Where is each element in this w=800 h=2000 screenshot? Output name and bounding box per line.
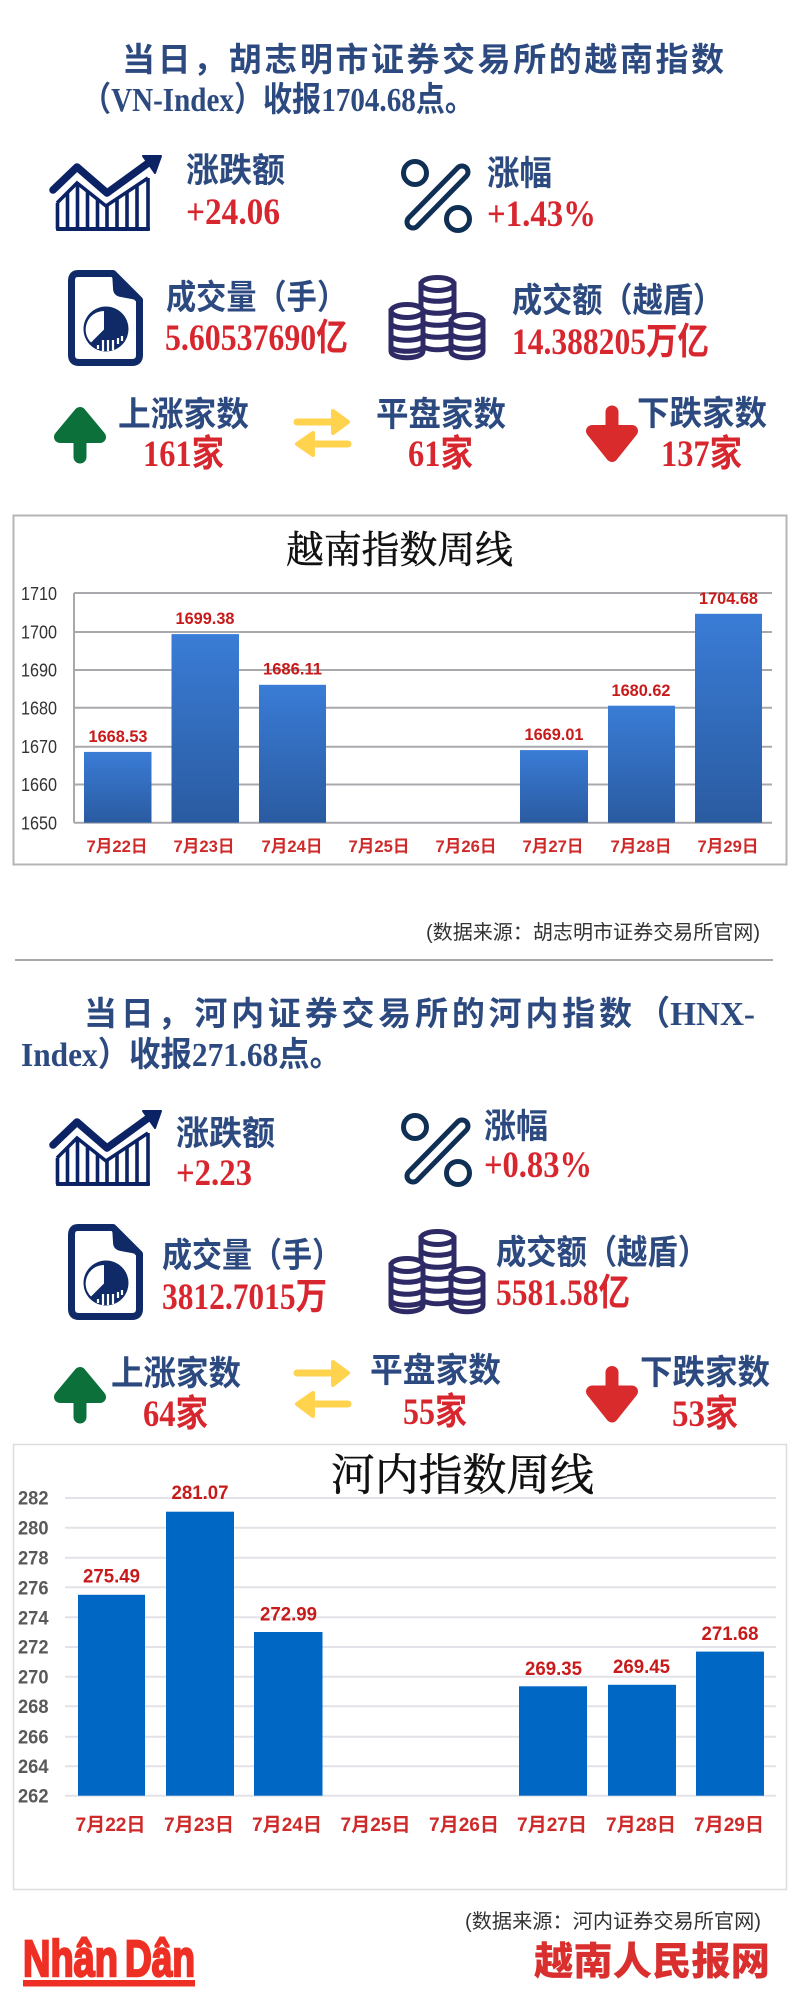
title: HNX-Index headline: 当日，河内证券交易所的河内指数: [84, 996, 632, 1033]
y axis labels: 266: [18, 1728, 48, 1748]
stat: change amount: +2.23: [176, 1153, 252, 1194]
icon: coin stacks: [391, 1232, 483, 1312]
stat: advancers: 161家: [143, 433, 224, 475]
date labels: 7月25日: [348, 837, 410, 856]
icon: document with pie chart: [72, 272, 142, 362]
bar chart: HNX-Index weekly: [14, 1439, 786, 1890]
stat: turnover: [496, 1234, 708, 1314]
y axis labels: 268: [18, 1697, 48, 1718]
y axis labels: [18, 1488, 49, 1808]
y axis labels: 270: [18, 1668, 48, 1688]
y axis labels: 1710: [21, 584, 57, 604]
y axis labels: [21, 584, 57, 834]
bars: [78, 1512, 764, 1796]
stat: unchanged: 55家: [403, 1391, 467, 1433]
stat: unchanged: 平盘家数: [370, 1352, 501, 1390]
stats panel: VN-Index: [53, 152, 767, 475]
value labels: 275.49: [83, 1566, 140, 1588]
y axis labels: 1680: [21, 698, 57, 718]
stat: decliners: 下跌家数: [637, 395, 767, 433]
icon: red down arrow: [592, 412, 632, 456]
stat: volume: 成交量（手）: [162, 1237, 342, 1275]
stat: advancers: 上涨家数: [118, 396, 249, 434]
stat: decliners: [640, 1354, 770, 1435]
icon: green up arrow: [60, 1373, 100, 1417]
title: HNX-Index headline: [21, 995, 755, 1074]
stat: change amount: [176, 1115, 275, 1194]
stat: decliners: 下跌家数: [640, 1354, 770, 1392]
stat: turnover: [512, 282, 723, 363]
stat: change percent: 涨幅: [484, 1108, 548, 1146]
icon: trend chart: [53, 1111, 161, 1186]
date labels: [76, 1815, 764, 1836]
y axis labels: 278: [18, 1548, 48, 1570]
y axis labels: 262: [18, 1786, 48, 1808]
stat: volume: 成交量（手）: [166, 279, 347, 317]
stat: advancers: [111, 1355, 241, 1435]
stat: advancers: [118, 396, 249, 475]
stat: change amount: +24.06: [186, 192, 280, 233]
icon: yellow swap arrows: [297, 1362, 348, 1416]
chart title: 河内指数周线: [331, 1439, 594, 1503]
stats panel: HNX-Index: [53, 1108, 770, 1435]
stat: change percent: 涨幅: [487, 155, 552, 193]
date labels: 7月28日: [610, 837, 672, 856]
y axis labels: 264: [18, 1757, 49, 1778]
stat: turnover: 成交额（越盾）: [512, 282, 723, 320]
stat: change percent: +1.43%: [487, 194, 596, 235]
title: VN-Index headline: [82, 42, 724, 119]
date labels: 7月24日: [252, 1815, 322, 1836]
y axis labels: 282: [18, 1488, 48, 1510]
date labels: 7月27日: [517, 1815, 587, 1836]
y axis labels: 276: [18, 1578, 48, 1600]
stat: decliners: [637, 395, 767, 475]
chart title: 越南指数周线: [286, 519, 513, 574]
stat: unchanged: 61家: [408, 433, 473, 475]
value labels: 1680.62: [612, 681, 670, 700]
value labels: 1669.01: [524, 725, 584, 744]
logo: Nhan Dan: Dân: [125, 1930, 195, 1987]
value labels: 1704.68: [699, 589, 758, 608]
y axis labels: 1690: [21, 660, 57, 680]
title: HNX-Index headline: Index）收报271.68点。: [21, 1036, 341, 1074]
date labels: 7月22日: [86, 837, 148, 856]
stat: change amount: 涨跌额: [186, 152, 285, 190]
value labels: 1668.53: [88, 727, 148, 746]
stat: change amount: 涨跌额: [176, 1115, 275, 1153]
value labels: 1699.38: [176, 609, 234, 628]
bars: [84, 614, 762, 823]
date labels: 7月25日: [340, 1815, 410, 1836]
stat: volume: 3812.7015万: [162, 1277, 327, 1318]
title: HNX-Index headline: （HNX-: [637, 995, 755, 1033]
source note: VN-Index: (数据来源：胡志明市证券交易所官网): [426, 921, 760, 944]
stat: change amount: [186, 152, 285, 233]
bar chart: VN-Index weekly: [14, 516, 786, 864]
value labels: [83, 1483, 758, 1680]
date labels: 7月22日: [76, 1815, 146, 1836]
y axis labels: 1660: [21, 775, 57, 795]
stat: decliners: 53家: [672, 1393, 738, 1435]
icon: trend chart: [53, 156, 161, 231]
date labels: [86, 837, 758, 856]
source note: HNX-Index: (数据来源：河内证券交易所官网): [465, 1910, 761, 1933]
value labels: 281.07: [172, 1483, 228, 1504]
stat: advancers: 64家: [143, 1393, 208, 1435]
stat: turnover: 14.388205万亿: [512, 321, 709, 363]
stat: turnover: 5581.58亿: [496, 1272, 630, 1314]
icon: yellow swap arrows: [297, 411, 348, 455]
y axis labels: 1670: [21, 737, 57, 757]
stat: turnover: 成交额（越盾）: [496, 1234, 708, 1272]
stat: unchanged: 平盘家数: [376, 396, 506, 434]
date labels: 7月29日: [694, 1815, 764, 1836]
y axis labels: 280: [18, 1518, 48, 1540]
y axis labels: 1700: [21, 622, 57, 642]
stat: volume: [165, 279, 348, 359]
logo: Nhan Dan: Nhân: [23, 1930, 118, 1987]
stat: advancers: 上涨家数: [111, 1355, 241, 1393]
stat: change percent: +0.83%: [484, 1145, 592, 1186]
icon: document with pie chart: [72, 1226, 142, 1316]
y axis labels: 272: [18, 1638, 48, 1658]
stat: volume: 5.60537690亿: [165, 317, 348, 359]
brand: 越南人民报网: 越南人民报网: [534, 1941, 770, 1984]
stat: change percent: [484, 1108, 592, 1186]
date labels: 7月28日: [606, 1815, 676, 1836]
title: VN-Index headline: 当日，胡志明市证券交易所的越南指数: [122, 42, 724, 79]
icon: percent: [404, 1116, 470, 1184]
stat: unchanged: [376, 396, 506, 475]
stat: decliners: 137家: [661, 433, 742, 475]
y axis labels: 274: [18, 1608, 49, 1630]
date labels: 7月26日: [429, 1815, 499, 1836]
icon: green up arrow: [60, 413, 100, 457]
icon: red down arrow: [592, 1372, 632, 1416]
value labels: 272.99: [260, 1604, 317, 1626]
stat: volume: [162, 1237, 342, 1318]
y axis labels: 1650: [21, 814, 57, 834]
date labels: 7月23日: [174, 837, 234, 856]
date labels: 7月24日: [262, 837, 322, 856]
value labels: [88, 589, 758, 746]
icon: percent: [404, 162, 470, 230]
date labels: 7月29日: [698, 837, 758, 856]
stat: unchanged: [370, 1352, 501, 1433]
date labels: 7月23日: [164, 1815, 234, 1836]
title: VN-Index headline: （VN-Index）收报1704.68点。: [82, 81, 474, 119]
value labels: 269.45: [613, 1657, 670, 1678]
icon: coin stacks: [391, 278, 483, 358]
value labels: 271.68: [702, 1624, 758, 1645]
date labels: 7月26日: [436, 837, 496, 856]
value labels: 269.35: [525, 1659, 582, 1680]
stat: change percent: [487, 155, 596, 235]
value labels: 1686.11: [263, 660, 322, 678]
date labels: 7月27日: [522, 837, 584, 856]
